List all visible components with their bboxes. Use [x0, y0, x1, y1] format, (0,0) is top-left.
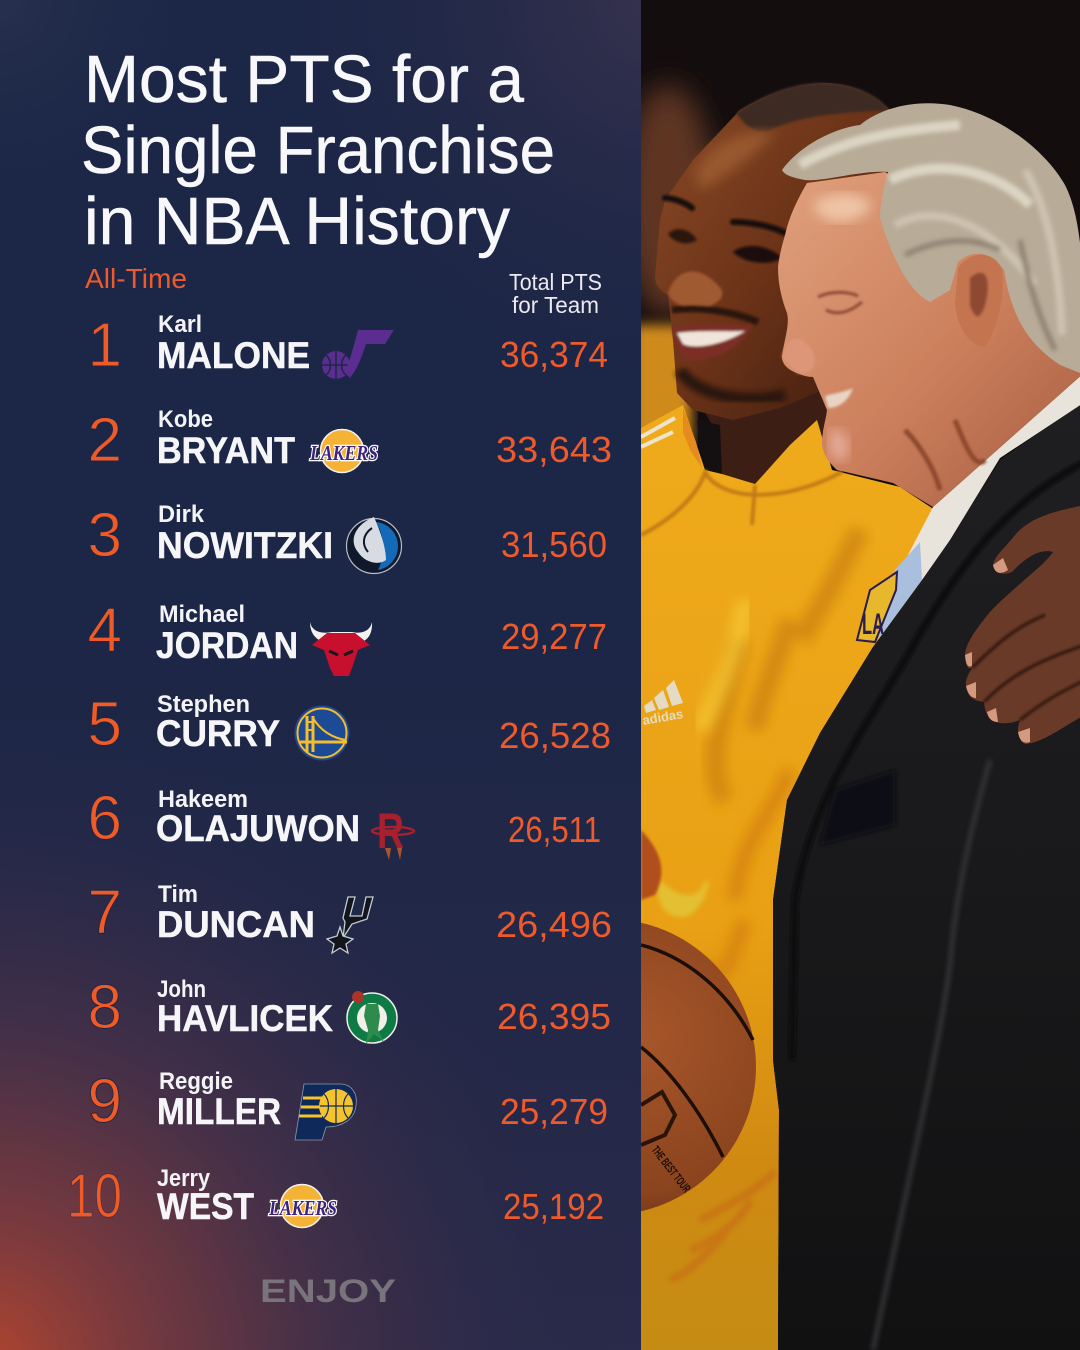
row 3: Dirk Nowitzki: 3: [88, 501, 122, 570]
row 1: Karl Malone: Karl: [158, 311, 202, 338]
row 10: Jerry West: Jerry: [157, 1165, 211, 1192]
row 4: Michael Jordan: 29,277: [501, 616, 607, 657]
title: Most PTS for a: [84, 42, 525, 117]
West shirt and collar: [908, 372, 1080, 580]
column header: Total PTS for Team: [509, 269, 602, 318]
row 6: Hakeem Olajuwon: 26,511: [508, 809, 601, 850]
row 7: Tim Duncan: 26,496: [496, 904, 612, 945]
logo: Los Angeles Lakers: [268, 1184, 337, 1228]
row 3: Dirk Nowitzki: 31,560: [501, 524, 607, 565]
row 10: Jerry West: 25,192: [503, 1186, 604, 1227]
West hair: [782, 103, 1080, 375]
row 4: Michael Jordan: JORDAN: [156, 625, 298, 666]
row 3: Dirk Nowitzki: [88, 501, 607, 574]
row 8: John Havlicek: HAVLICEK: [157, 998, 333, 1039]
row 9: Reggie Miller: [88, 1067, 608, 1140]
title: [81, 42, 555, 259]
logo: Los Angeles Lakers: LAKERS: [309, 441, 378, 465]
logo: Indiana Pacers: [295, 1084, 356, 1140]
panel: gradient background: [0, 0, 642, 1350]
column header: Total PTS for Team: for Team: [512, 292, 599, 318]
row 1: Karl Malone: 1: [88, 311, 122, 380]
adidas logo: adidas: [641, 706, 684, 728]
row 8: John Havlicek: 26,395: [497, 996, 611, 1037]
logo: Dallas Mavericks: [346, 517, 402, 574]
row 3: Dirk Nowitzki: NOWITZKI: [157, 525, 333, 566]
row 1: Karl Malone: [88, 311, 608, 380]
row 3: Dirk Nowitzki: Dirk: [158, 501, 205, 528]
row 1: Karl Malone: MALONE: [157, 335, 310, 376]
row 9: Reggie Miller: Reggie: [159, 1068, 233, 1095]
row 2: Kobe Bryant: [88, 406, 612, 475]
row 9: Reggie Miller: 25,279: [500, 1091, 608, 1132]
row 7: Tim Duncan: Tim: [158, 881, 198, 908]
row 4: Michael Jordan: 4: [88, 596, 122, 665]
West suit: [773, 400, 1080, 1350]
Lakers patch: [857, 572, 897, 642]
row 6: Hakeem Olajuwon: Hakeem: [158, 786, 248, 813]
row 6: Hakeem Olajuwon: OLAJUWON: [156, 808, 360, 849]
row 8: John Havlicek: John: [157, 976, 206, 1003]
West ear: [955, 255, 1003, 347]
row 10: Jerry West: WEST: [157, 1186, 254, 1227]
Kobe hand on shoulder: [965, 505, 1080, 744]
row 5: Stephen Curry: [88, 690, 611, 760]
logo: Los Angeles Lakers: [309, 430, 378, 472]
logo: San Antonio Spurs: [327, 897, 373, 953]
column header: Total PTS for Team: Total PTS: [509, 269, 602, 295]
logo: Golden State Warriors: [294, 706, 350, 760]
logo: Houston Rockets: R: [377, 803, 404, 859]
Lakers patch: LA: [862, 608, 884, 641]
adidas logo: [643, 680, 683, 725]
row 5: Stephen Curry: 5: [88, 690, 122, 759]
Kobe neck: [705, 392, 827, 484]
West neck and face: [778, 172, 1080, 507]
row 9: Reggie Miller: 9: [88, 1067, 122, 1136]
row 4: Michael Jordan: [88, 596, 607, 676]
logo: Los Angeles Lakers: LAKERS: [268, 1196, 337, 1220]
row 2: Kobe Bryant: 33,643: [496, 429, 612, 470]
row 1: Karl Malone: 36,374: [500, 334, 608, 375]
row 9: Reggie Miller: MILLER: [157, 1091, 281, 1132]
row 5: Stephen Curry: 26,528: [499, 715, 611, 756]
row 10: Jerry West: 10: [67, 1162, 122, 1231]
row 8: John Havlicek: [88, 973, 611, 1044]
title: Single Franchise: [81, 113, 555, 188]
row 4: Michael Jordan: Michael: [159, 601, 245, 628]
row 8: John Havlicek: 8: [88, 973, 122, 1042]
Kobe head: [655, 83, 890, 420]
row 7: Tim Duncan: DUNCAN: [157, 904, 315, 945]
row 7: Tim Duncan: 7: [88, 878, 122, 947]
logo: Utah Jazz: [322, 330, 394, 379]
row 10: Jerry West: [67, 1162, 604, 1231]
brand: ENJOY wordmark: ENJOY: [260, 1273, 396, 1309]
logo: Boston Celtics: [347, 991, 397, 1044]
row 6: Hakeem Olajuwon: [88, 784, 601, 860]
row 5: Stephen Curry: Stephen: [157, 691, 250, 718]
row 5: Stephen Curry: CURRY: [156, 713, 280, 754]
logo: Chicago Bulls: [310, 622, 372, 676]
photo: Kobe Bryant and Jerry West: [641, 0, 1080, 1350]
row 2: Kobe Bryant: Kobe: [158, 406, 213, 433]
subtitle: All-Time: All-Time: [85, 263, 187, 294]
row 2: Kobe Bryant: 2: [88, 406, 122, 475]
row 2: Kobe Bryant: BRYANT: [157, 430, 295, 471]
title: in NBA History: [84, 184, 510, 259]
row 7: Tim Duncan: [88, 878, 612, 953]
row 6: Hakeem Olajuwon: 6: [88, 784, 122, 853]
West tie: [878, 542, 922, 640]
Ball: [641, 922, 756, 1212]
photo: Kobe Bryant and Jerry West: THE BEST TOUR: [649, 1143, 694, 1195]
jersey: [641, 405, 935, 1350]
